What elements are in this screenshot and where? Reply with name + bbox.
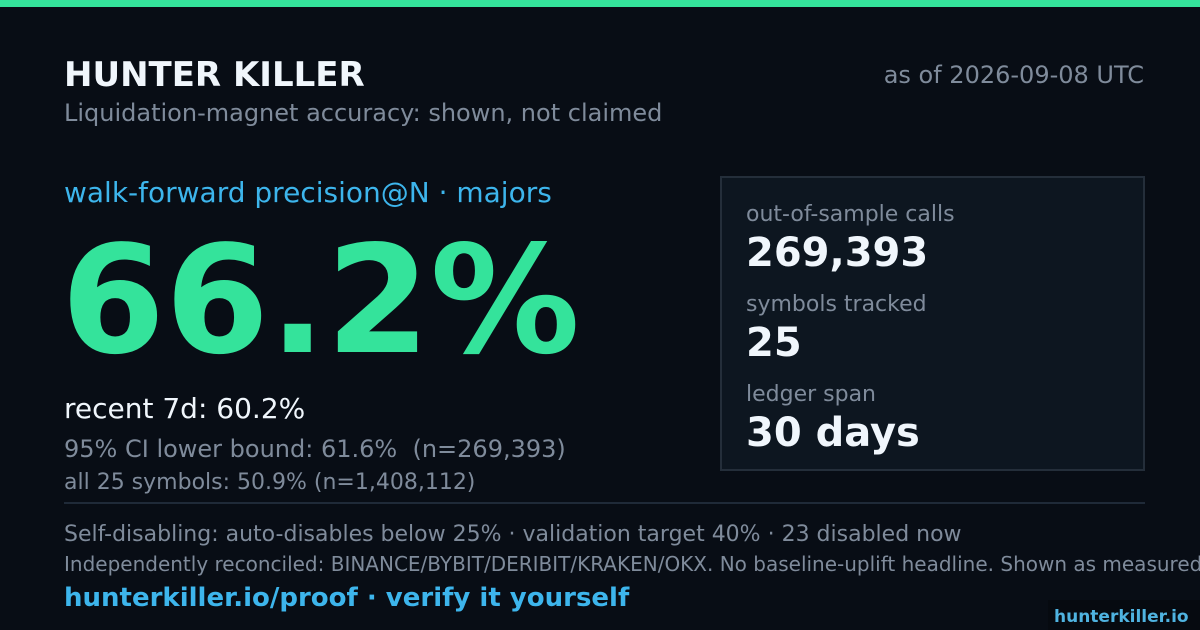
date stamp: as of 2026-09-08 UTC — [884, 61, 1144, 89]
stat: out-of-sample calls: 269,393 — [746, 230, 928, 276]
hero metric: 66.2% — [61, 214, 580, 388]
stat: ledger span: ledger span — [746, 382, 876, 407]
all symbols stat: all 25 symbols: 50.9% (n=1,408,112) — [64, 470, 475, 495]
confidence interval stat: 95% CI lower bound: 61.6% (n=269,393) — [64, 435, 566, 463]
watermark: hunterkiller.io — [1054, 607, 1189, 627]
title: HUNTER KILLER — [64, 55, 365, 95]
stat: symbols tracked — [746, 292, 927, 366]
stat: out-of-sample calls: out-of-sample calls — [746, 202, 955, 227]
watermark — [1048, 600, 1200, 630]
stat: symbols tracked: symbols tracked — [746, 292, 927, 317]
reconciliation note: Independently reconciled: BINANCE/BYBIT/DERIBIT/KRAKEN/OKX. No baseline-uplift headline. Shown as measured. — [64, 552, 1200, 576]
metric label: walk-forward precision@N · majors — [64, 176, 552, 209]
subtitle: Liquidation-magnet accuracy: shown, not claimed — [64, 99, 662, 127]
self-disabling note: Self-disabling: auto-disables below 25% · validation target 40% · 23 disabled now — [64, 522, 962, 547]
proof link: hunterkiller.io/proof · verify it yourself — [64, 583, 630, 613]
stat: ledger span — [746, 382, 920, 456]
stat: ledger span: 30 days — [746, 410, 920, 456]
top accent bar — [0, 0, 1200, 7]
stat: symbols tracked: 25 — [746, 320, 802, 366]
stat: out-of-sample calls — [746, 202, 955, 276]
panel: ledger stats — [721, 177, 1144, 470]
recent 7d stat: recent 7d: 60.2% — [64, 392, 305, 425]
